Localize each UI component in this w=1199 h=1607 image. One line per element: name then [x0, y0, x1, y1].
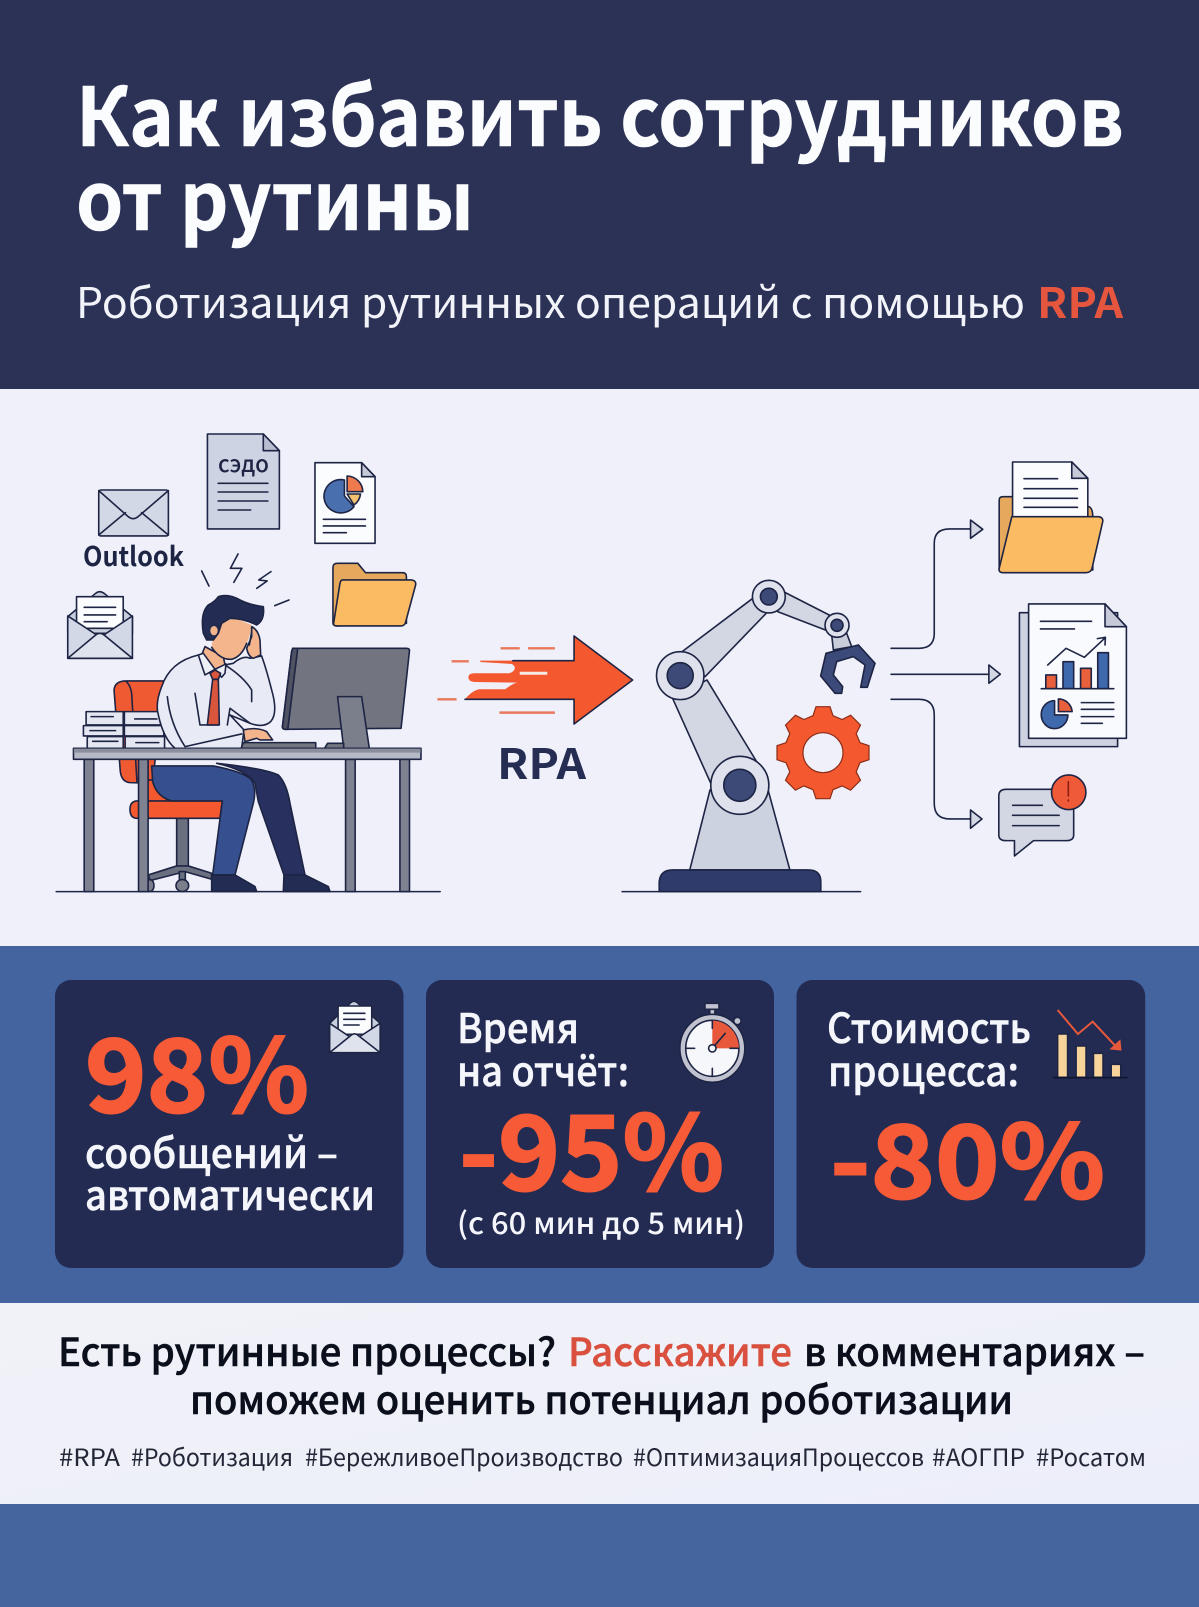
monitor and keyboard	[241, 648, 409, 748]
icon: folder	[333, 563, 416, 626]
card heading	[457, 995, 629, 1098]
hashtags: #АОГПР	[932, 1438, 1025, 1473]
header panel	[0, 0, 1199, 389]
arrow: RPA speed arrow	[437, 636, 633, 724]
hashtags: #Росатом	[1036, 1438, 1146, 1473]
hashtags: #Роботизация	[131, 1438, 293, 1473]
stat description	[85, 1120, 375, 1222]
stat description: сообщений –	[85, 1120, 338, 1180]
label: Outlook: Outlook	[83, 535, 185, 574]
hashtags: #БережливоеПроизводство	[305, 1438, 623, 1473]
title	[76, 53, 1124, 254]
card heading	[827, 995, 1031, 1098]
bottom band	[0, 1504, 1199, 1607]
icon: chat with alert	[999, 775, 1086, 856]
stat value: 98%	[85, 996, 309, 1142]
person: employee torso and head	[157, 596, 275, 748]
hashtags: #RPA	[59, 1438, 120, 1473]
stat value: -95%	[459, 1071, 724, 1220]
call to action text	[58, 1322, 1145, 1426]
icon: open envelope small	[330, 1001, 380, 1053]
icon: document with pie chart	[315, 463, 375, 543]
stats panel	[0, 946, 1199, 1303]
chair back	[114, 681, 165, 783]
card: process cost	[796, 980, 1145, 1268]
icon: falling cost chart	[1053, 1010, 1128, 1078]
label: RPA: RPA	[497, 731, 587, 792]
icon: paper stacks	[83, 712, 165, 748]
icon: stress marks	[202, 554, 289, 606]
left scene: overloaded employee	[56, 434, 633, 892]
icon: outlook envelope	[99, 490, 168, 536]
title: Как избавить сотрудников	[76, 53, 1124, 170]
call to action text: в комментариях –	[804, 1322, 1145, 1378]
robot arm	[622, 580, 875, 892]
stat description: автоматически	[85, 1162, 375, 1222]
robot gripper	[821, 613, 875, 693]
icon: folder with document	[999, 462, 1103, 573]
call to action text: Есть рутинные процессы?	[58, 1322, 556, 1378]
subtitle: Роботизация рутинных операций с помощью	[76, 270, 1025, 331]
card heading: Стоимость	[827, 995, 1031, 1055]
card heading: Время	[457, 995, 579, 1055]
label: sedo: сэдо	[218, 445, 269, 479]
call to action text: Расскажите	[568, 1322, 792, 1378]
card: 98% messages	[55, 980, 404, 1268]
icon: gear	[777, 707, 869, 799]
legs and chair seat	[130, 763, 330, 892]
desk	[56, 748, 440, 892]
right scene: robot and outputs	[622, 462, 1126, 892]
card heading: на отчёт:	[457, 1038, 629, 1098]
icon: stopwatch	[680, 1003, 745, 1082]
card heading: процесса:	[828, 1038, 1019, 1098]
hashtags: #ОптимизацияПроцессов	[633, 1438, 924, 1473]
title: от рутины	[76, 137, 474, 254]
subtitle: RPA	[1037, 270, 1124, 331]
icon: report with charts	[1019, 604, 1126, 747]
hashtags	[59, 1438, 1146, 1473]
icon: open envelope	[68, 592, 132, 658]
call to action panel	[0, 1303, 1199, 1504]
stat note: (с 60 мин до 5 мин)	[457, 1199, 745, 1243]
arrows: three outputs	[891, 520, 1000, 828]
stat value: -80%	[830, 1082, 1105, 1228]
icon: document sedo	[207, 434, 279, 529]
call to action text: поможем оценить потенциал роботизации	[190, 1370, 1013, 1426]
illustration panel	[0, 389, 1199, 946]
card: report time	[426, 980, 774, 1268]
